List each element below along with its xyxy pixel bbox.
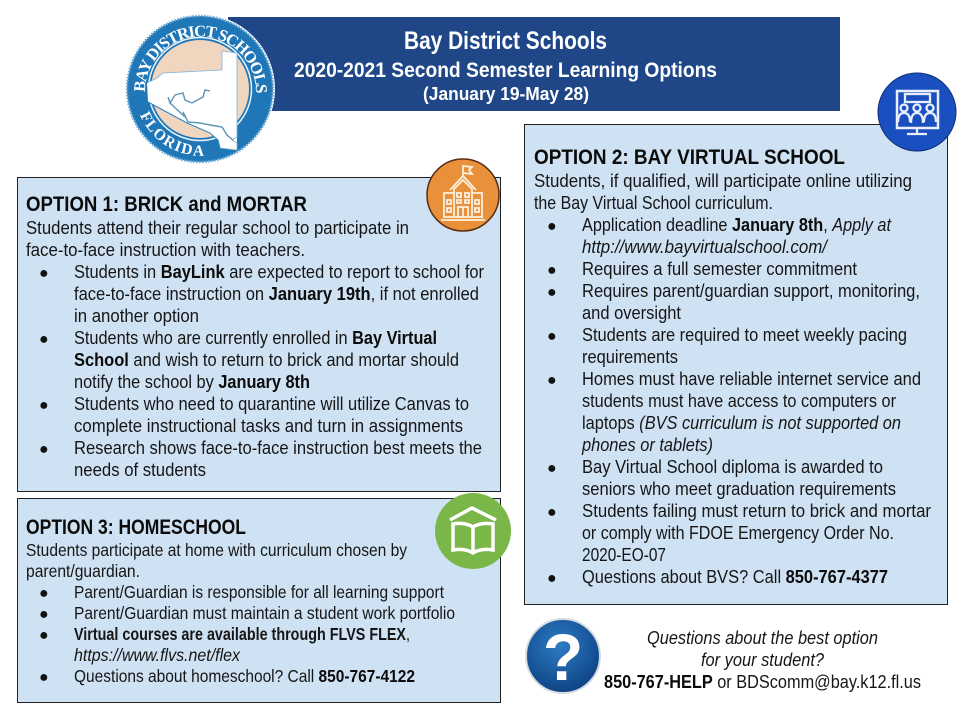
panel: option 1 brick and mortar: ● xyxy=(39,331,49,348)
panel: option 2 bay virtual school: students must have access to computers or xyxy=(582,390,896,411)
panel: option 1 brick and mortar: notify the school by January 8th xyxy=(74,371,310,392)
panel: option 3 homeschool xyxy=(18,498,500,702)
panel: option 2 bay virtual school: ● xyxy=(547,328,557,345)
panel: option 2 bay virtual school: seniors who meet graduation requirements xyxy=(582,478,896,499)
panel: option 3 homeschool: parent/guardian. xyxy=(26,561,140,581)
panel: option 3 homeschool: OPTION 3: HOMESCHOOL xyxy=(26,515,246,539)
panel: option 2 bay virtual school: ● xyxy=(547,372,557,389)
panel: option 2 bay virtual school: Requires a full semester commitment xyxy=(582,258,857,279)
panel: option 1 brick and mortar: ● xyxy=(39,441,49,458)
panel: option 3 homeschool: ● xyxy=(39,627,49,644)
panel: option 2 bay virtual school: phones or tablets) xyxy=(581,434,713,455)
contact callout: 850-767-HELP or BDScomm@bay.k12.fl.us xyxy=(604,671,921,692)
panel: option 1 brick and mortar: Research shows face-to-face instruction best meets the xyxy=(74,437,482,458)
panel: option 2 bay virtual school: Requires parent/guardian support, monitoring, xyxy=(582,280,920,301)
panel: option 2 bay virtual school: Application deadline January 8th, Apply at xyxy=(582,214,892,235)
panel: option 3 homeschool: Questions about homeschool? Call 850-767-4122 xyxy=(74,666,415,686)
panel: option 1 brick and mortar: Students who are currently enrolled in Bay Virtual xyxy=(74,327,437,348)
panel: option 2 bay virtual school: 2020-EO-07 xyxy=(582,544,666,565)
icon: question mark: ? xyxy=(543,620,583,694)
panel: option 2 bay virtual school: Questions about BVS? Call 850-767-4377 xyxy=(582,566,888,587)
panel: option 1 brick and mortar: complete instructional tasks and turn in assignments xyxy=(74,415,463,436)
contact callout: for your student? xyxy=(701,649,825,670)
title banner: Bay District Schools xyxy=(404,27,607,55)
panel: option 3 homeschool: Parent/Guardian must maintain a student work portfolio xyxy=(74,603,455,623)
panel: option 1 brick and mortar: ● xyxy=(39,265,49,282)
district logo seal: FLORIDA xyxy=(140,110,204,156)
panel: option 1 brick and mortar: OPTION 1: BRICK and MORTAR xyxy=(26,192,307,216)
panel: option 2 bay virtual school xyxy=(524,124,948,604)
panel: option 3 homeschool: ● xyxy=(39,669,49,686)
title banner xyxy=(228,17,840,111)
panel: option 1 brick and mortar: Students in BayLink are expected to report to school for xyxy=(74,261,484,282)
panel: option 1 brick and mortar: face-to-face instruction on January 19th, if not enrolled xyxy=(74,283,479,304)
panel: option 3 homeschool: ● xyxy=(39,606,49,623)
panel: option 2 bay virtual school: ● xyxy=(547,504,557,521)
panel: option 1 brick and mortar xyxy=(18,178,500,492)
panel: option 2 bay virtual school: ● xyxy=(547,262,557,279)
panel: option 1 brick and mortar: Students who need to quarantine will utilize Canvas to xyxy=(74,393,469,414)
panel: option 2 bay virtual school: Homes must have reliable internet service and xyxy=(582,368,921,389)
panel: option 2 bay virtual school: and oversight xyxy=(582,302,681,323)
panel: option 2 bay virtual school: ● xyxy=(547,460,557,477)
title banner: 2020-2021 Second Semester Learning Options xyxy=(294,58,717,82)
contact callout xyxy=(604,627,921,692)
contact callout: Questions about the best option xyxy=(647,627,878,648)
panel: option 2 bay virtual school: the Bay Virtual School curriculum. xyxy=(534,192,773,213)
panel: option 3 homeschool: https://www.flvs.net/flex xyxy=(74,645,241,665)
panel: option 3 homeschool: Parent/Guardian is responsible for all learning support xyxy=(74,582,444,602)
panel: option 1 brick and mortar: ● xyxy=(39,397,49,414)
panel: option 1 brick and mortar: Students attend their regular school to participate in xyxy=(26,217,409,238)
panel: option 3 homeschool: ● xyxy=(39,585,49,602)
panel: option 1 brick and mortar: needs of students xyxy=(74,459,206,480)
icon: virtual classroom xyxy=(878,73,956,151)
icon: question mark xyxy=(526,619,600,694)
panel: option 2 bay virtual school: Bay Virtual School diploma is awarded to xyxy=(582,456,883,477)
panel: option 2 bay virtual school: http://www.bayvirtualschool.com/ xyxy=(582,236,829,257)
panel: option 2 bay virtual school: requirements xyxy=(582,346,678,367)
panel: option 1 brick and mortar: in another option xyxy=(74,305,199,326)
panel: option 2 bay virtual school: Students are required to meet weekly pacing xyxy=(582,324,907,345)
panel: option 2 bay virtual school: ● xyxy=(547,218,557,235)
panel: option 2 bay virtual school: ● xyxy=(547,570,557,587)
district logo seal xyxy=(126,14,275,164)
panel: option 2 bay virtual school: or comply with FDOE Emergency Order No. xyxy=(582,522,894,543)
panel: option 2 bay virtual school: Students failing must return to brick and mortar xyxy=(582,500,931,521)
icon: open book house xyxy=(435,493,511,569)
panel: option 2 bay virtual school: Students, if qualified, will participate online utilizing xyxy=(534,170,912,191)
district logo seal: BAY DISTRICT SCHOOLS xyxy=(134,26,267,93)
panel: option 2 bay virtual school: laptops (BVS curriculum is not supported on xyxy=(582,412,901,433)
panel: option 2 bay virtual school: ● xyxy=(547,284,557,301)
panel: option 1 brick and mortar: School and wish to return to brick and mortar should xyxy=(74,349,459,370)
icon: school building xyxy=(427,159,499,231)
panel: option 2 bay virtual school: OPTION 2: BAY VIRTUAL SCHOOL xyxy=(534,145,845,169)
panel: option 3 homeschool: Students participate at home with curriculum chosen by xyxy=(26,540,407,560)
panel: option 3 homeschool: Virtual courses are available through FLVS FLEX, xyxy=(74,624,410,644)
title banner: (January 19-May 28) xyxy=(423,83,589,104)
panel: option 1 brick and mortar: face-to-face instruction with teachers. xyxy=(26,239,305,260)
